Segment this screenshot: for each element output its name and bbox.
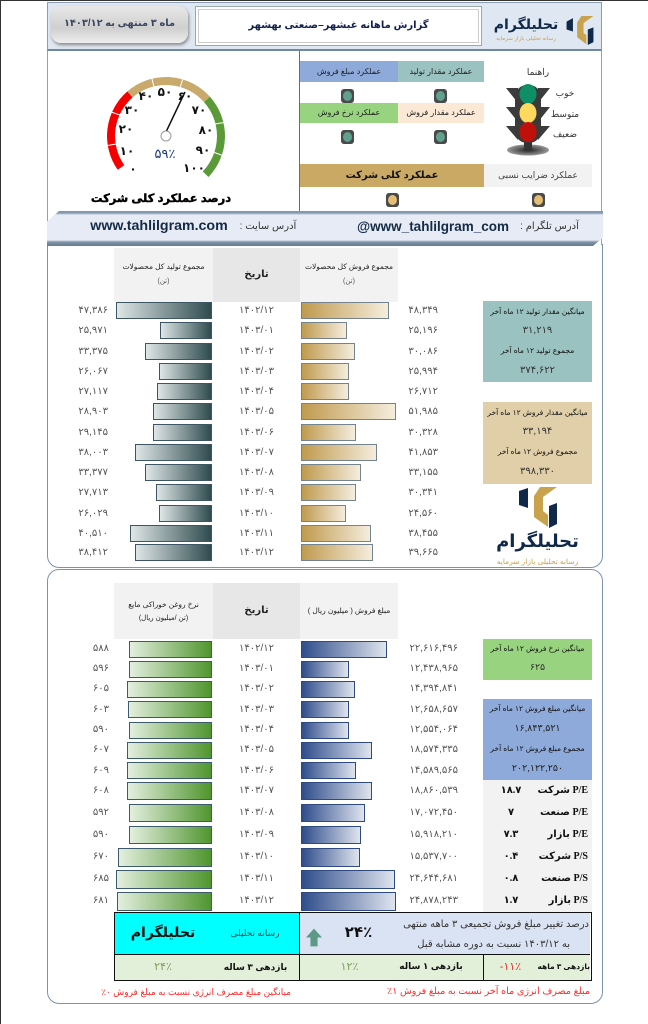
rate values: ۶۸۱ [93,895,109,906]
rate summary box: میانگین نرخ فروش ۱۲ ماه آخر [491,644,584,653]
light: ratios [532,193,545,207]
3-month return [484,955,590,980]
report title: گزارش ماهانه غبشهر–صنعتی بهشهر [248,20,429,31]
sales amount values [409,643,458,906]
rate values: ۶۰۹ [93,765,109,776]
dates column: ۱۴۰۳/۱۰ [239,851,274,862]
sales amount values: ۱۵,۹۱۸,۲۱۰ [409,829,458,840]
rate values: ۵۹۰ [93,724,109,735]
valuation ratios table [483,780,592,912]
sales amount label: عملکرد مبلغ فروش [317,67,381,76]
sales summary box: مجموع فروش ۱۲ ماه آخر [498,447,577,456]
bar chart: sales quantity [301,302,396,561]
large logo [496,487,579,566]
dates column: ۱۴۰۲/۱۲ [239,305,274,316]
sales amount values: ۱۵,۵۳۷,۷۰۰ [409,851,458,862]
dates column [239,305,274,558]
dates column: ۱۴۰۳/۰۳ [239,704,274,715]
rate header: نرخ روغن خوراکی مایع [128,600,199,609]
legend medium: متوسط [551,109,579,119]
rate header: (تن /میلیون ریال) [139,615,188,622]
valuation ratios table: ۷ [508,807,514,818]
date header [213,583,300,639]
rate summary box: ۶۲۵ [530,662,545,673]
valuation ratios table: P/S بازار [549,895,588,906]
1-year return: ۱۲٪ [341,961,358,973]
dates column: ۱۴۰۳/۰۴ [239,724,274,735]
gauge scale numbers: ۲۰ [119,122,133,136]
dates column: ۱۴۰۳/۱۲ [239,547,274,558]
dates column: ۱۴۰۳/۰۲ [239,683,274,694]
production values: ۳۳,۳۷۷ [78,467,108,478]
gauge percent: ۵۹٪ [155,147,175,162]
valuation ratios table: P/E شرکت [537,785,588,796]
sales amount values: ۲۴,۸۷۸,۲۴۳ [409,895,458,906]
legend good: خوب [556,88,574,98]
gauge scale numbers: ۰ [129,162,137,176]
3-month return: بازدهی ۳ ماهه [537,962,590,971]
dates column [239,643,274,906]
dates column: ۱۴۰۳/۰۵ [239,406,274,417]
amount summary box: مجموع مبلغ فروش ۱۲ ماه آخر [490,744,585,753]
logo mark [566,16,594,45]
light: overall [386,193,399,207]
dates column: ۱۴۰۳/۰۹ [239,487,274,498]
bar chart: sales amount [301,641,396,911]
gauge needle [161,92,185,141]
gauge scale numbers [119,85,213,176]
site url: www.tahlilgram.com [90,218,228,234]
dates column: ۱۴۰۳/۱۲ [239,895,274,906]
production header [114,248,213,302]
production values: ۲۶,۰۲۹ [78,508,108,519]
brand cell: رسانه تحلیلی [231,928,279,938]
production values: ۲۶,۰۶۷ [78,366,108,377]
production values: ۳۸,۴۱۲ [78,547,108,558]
icon: up arrow [306,928,322,946]
relative ratios label [484,164,592,187]
dates column: ۱۴۰۳/۰۵ [239,744,274,755]
brand cell: تحلیلگرام [131,924,195,940]
icon: traffic light [506,84,550,156]
3-month return: -۱۱٪ [500,961,521,973]
sales header: (تن) [343,278,355,285]
date header: تاریخ [244,605,269,616]
report title box [195,6,482,46]
amount summary box: ۲۰۲,۱۲۲,۲۵۰ [512,763,563,774]
3-year return: بازدهی ۳ ساله [224,962,287,972]
date badge [51,6,188,43]
sales quantity values: ۲۶,۷۱۲ [408,386,438,397]
sales quantity values: ۳۸,۴۵۵ [408,528,438,539]
production values: ۲۷,۷۱۳ [78,487,108,498]
light: production [434,89,447,103]
gauge scale numbers: ۳۰ [125,103,139,117]
address bar [47,211,603,246]
sales quantity values: ۳۰,۳۴۱ [408,487,438,498]
panel: production and sales quantity [47,244,603,568]
sales quantity label [398,103,484,123]
dates column: ۱۴۰۳/۰۶ [239,765,274,776]
date header [213,248,300,302]
logo tagline: رسانه تحلیلی بازار سرمایه [496,36,556,42]
amount header [300,583,398,639]
logo wordmark: تحلیلگرام [494,16,558,32]
sales quantity values: ۳۹,۶۶۵ [408,547,438,558]
energy note: average: میانگین مبلغ مصرف انرژی نسبت به مبلغ فروش ۰٪ [101,987,291,997]
gauge dial [107,77,225,177]
sales amount values: ۱۴,۳۹۴,۸۴۱ [409,683,458,694]
rate summary box [483,639,592,680]
panel: performance indicators [300,61,592,207]
valuation ratios table: ۰.۸ [504,873,518,884]
sales summary box: میانگین مقدار فروش ۱۲ ماه آخر [487,408,588,417]
panel: sales amount and rate [47,569,603,1004]
telegram label: آدرس تلگرام : [520,221,579,232]
production summary box: ۳۷۴,۶۲۲ [520,365,555,376]
production summary box: مجموع تولید ۱۲ ماه آخر [501,346,574,355]
amount summary box: میانگین مبلغ فروش ۱۲ ماه آخر [490,704,585,713]
sales amount values: ۲۴,۶۴۴,۶۸۱ [409,873,458,884]
sales quantity values: ۲۵,۹۹۴ [408,366,438,377]
dates column: ۱۴۰۳/۰۱ [239,663,274,674]
production values: ۲۵,۹۷۱ [78,325,108,336]
dates column: ۱۴۰۳/۰۱ [239,325,274,336]
change percent: ۲۴٪ [345,924,372,941]
sales summary box [483,402,592,484]
production values: ۲۸,۹۰۳ [78,406,108,417]
gauge scale numbers: ۱۰ [120,144,134,158]
date header: تاریخ [244,269,269,280]
logo wordmark: تحلیلگرام [496,531,579,551]
rate header [114,583,213,639]
date text: ماه ۳ منتهی به ۱۴۰۳/۱۲ [64,18,175,29]
dates column: ۱۴۰۳/۰۴ [239,386,274,397]
sales summary box: ۳۹۸,۳۳۰ [520,466,555,477]
valuation ratios table: P/S صنعت [541,873,588,884]
production header: مجموع تولید کل محصولات [122,262,205,271]
rate values: ۵۹۰ [93,829,109,840]
rate values: ۵۹۲ [93,807,109,818]
sales rate label [300,103,398,123]
production values: ۴۷,۳۸۶ [78,305,108,316]
dates column: ۱۴۰۳/۰۶ [239,427,274,438]
3-year return: ۲۴٪ [154,961,172,973]
gauge scale numbers: ۶۰ [178,89,192,103]
production label [398,61,484,82]
1-year return: بازدهی ۱ ساله [399,961,463,971]
sales quantity values: ۲۵,۱۹۶ [408,325,438,336]
gauge scale numbers: ۹۰ [196,143,210,157]
rate values: ۵۹۶ [93,663,109,674]
sales amount values: ۱۲,۴۳۸,۹۶۵ [409,663,458,674]
rate values: ۶۰۳ [93,704,109,715]
production summary box: ۳۱,۲۱۹ [523,325,552,336]
3-year return [115,955,300,980]
amount summary box: ۱۶,۸۴۳,۵۲۱ [514,723,561,734]
sales quantity values: ۳۰,۳۲۸ [408,427,438,438]
gauge scale numbers: ۷۰ [192,103,206,117]
amount header: مبلغ فروش ( میلیون ریال ) [308,606,390,615]
bottom summary table [114,912,592,981]
light: sales quantity [434,130,447,144]
valuation ratios table: ۱.۷ [504,895,518,906]
dates column: ۱۴۰۳/۰۲ [239,346,274,357]
dates column: ۱۴۰۲/۱۲ [239,643,274,654]
rate values: ۶۰۸ [93,785,109,796]
gauge scale numbers: ۵۰ [158,85,172,99]
production summary box [483,301,592,382]
logo mark [519,487,557,528]
sales quantity values: ۴۱,۸۵۳ [408,447,438,458]
sales amount values: ۱۲,۵۵۴,۰۶۴ [409,724,458,735]
production values: ۲۹,۱۴۵ [78,427,108,438]
1-year return [300,955,484,980]
production label: عملکرد مقدار تولید [410,67,472,76]
energy note: last month: مبلغ مصرف انرژی ماه آخر نسبت به مبلغ فروش ۱٪ [387,986,590,997]
production values [78,305,108,558]
outer frame side lines [47,3,602,245]
rate values [93,643,109,906]
valuation ratios table: ۷.۳ [504,829,518,840]
gauge scale numbers: ۸۰ [199,123,213,137]
logo tagline: رسانه تحلیلی بازار سرمایه [497,557,578,566]
sales amount values: ۱۸,۸۶۰,۵۳۹ [409,785,458,796]
vertical divider [299,51,300,211]
valuation ratios table: P/S شرکت [539,851,588,862]
sales summary box: ۳۳,۱۹۴ [523,426,552,437]
sales amount label [300,61,398,82]
valuation ratios table: ۰.۴ [504,851,518,862]
rate values: ۶۰۷ [93,744,109,755]
valuation ratios table: P/E بازار [547,829,588,840]
bar chart: edible oil rate [116,641,212,911]
production values: ۳۸,۰۰۳ [78,447,108,458]
sales amount values: ۲۲,۶۱۶,۴۹۶ [409,643,458,654]
sales amount values: ۱۴,۵۸۹,۵۶۵ [409,765,458,776]
rate values: ۶۸۵ [93,873,109,884]
production values: ۴۰,۵۱۰ [78,528,108,539]
dates column: ۱۴۰۳/۰۷ [239,447,274,458]
sales rate label: عملکرد نرخ فروش [318,108,380,117]
header band [47,2,602,51]
dates column: ۱۴۰۳/۰۸ [239,467,274,478]
sales header [300,248,398,302]
sales amount values: ۱۸,۵۷۴,۳۳۵ [409,744,458,755]
amount summary box [483,699,592,780]
change description: درصد تغییر مبلغ فروش تجمیعی ۳ ماهه منتهی [403,919,589,930]
gauge scale numbers: ۱۰۰ [183,161,205,175]
light: sales amount [341,89,354,103]
dates column: ۱۴۰۳/۰۷ [239,785,274,796]
dates column: ۱۴۰۳/۰۳ [239,366,274,377]
dates column: ۱۴۰۳/۰۸ [239,807,274,818]
production header: (تن) [158,278,169,285]
gauge scale numbers: ۴۰ [139,89,153,103]
production values: ۳۳,۳۷۵ [78,346,108,357]
sales quantity values: ۲۴,۵۶۰ [408,508,438,519]
dates column: ۱۴۰۳/۰۹ [239,829,274,840]
sales quantity values: ۴۸,۳۴۹ [408,305,438,316]
header logo [494,16,594,45]
rate values: ۵۸۸ [93,643,109,654]
relative ratios label: عملکرد ضرایب نسبی [498,170,578,180]
dates column: ۱۴۰۳/۱۱ [239,873,274,884]
dates column: ۱۴۰۳/۱۱ [239,528,274,539]
light: sales rate [341,130,354,144]
rate values: ۶۷۰ [93,851,109,862]
valuation ratios table: ۱۸.۷ [501,785,521,796]
bar chart: production [116,302,212,561]
overall performance label: عملکرد کلی شرکت [346,170,438,181]
gauge caption: درصد عملکرد کلی شرکت [91,193,231,205]
production summary box: میانگین مقدار تولید ۱۲ ماه آخر [490,307,585,316]
sales quantity values: ۳۳,۱۵۵ [408,467,438,478]
sales header: مجموع فروش کل محصولات [305,262,393,271]
production values: ۲۷,۱۱۷ [78,386,108,397]
dates column: ۱۴۰۳/۱۰ [239,508,274,519]
panel: legend [506,67,579,156]
legend title: راهنما [527,67,549,77]
sales amount values: ۱۷,۰۷۲,۴۵۰ [409,807,458,818]
brand cell [115,913,300,955]
sales change cell [300,913,590,955]
sales change cell: به ۱۴۰۳/۱۲ نسبت به دوره مشابه قبل [417,939,570,950]
rate values: ۶۰۵ [93,683,109,694]
legend weak: ضعیف [553,129,577,139]
site label: آدرس سایت : [240,221,296,232]
sales amount values: ۱۲,۶۵۸,۶۵۷ [409,704,458,715]
sales quantity values: ۵۱,۹۸۵ [408,406,438,417]
sales quantity values [408,305,438,558]
overall performance label [300,164,484,187]
panel: gauge [91,77,231,206]
sales quantity values: ۳۰,۰۸۶ [408,346,438,357]
sales quantity label: عملکرد مقدار فروش [406,108,476,117]
valuation ratios table: P/E صنعت [540,807,588,818]
telegram handle: @www_tahlilgram_com [357,219,509,234]
